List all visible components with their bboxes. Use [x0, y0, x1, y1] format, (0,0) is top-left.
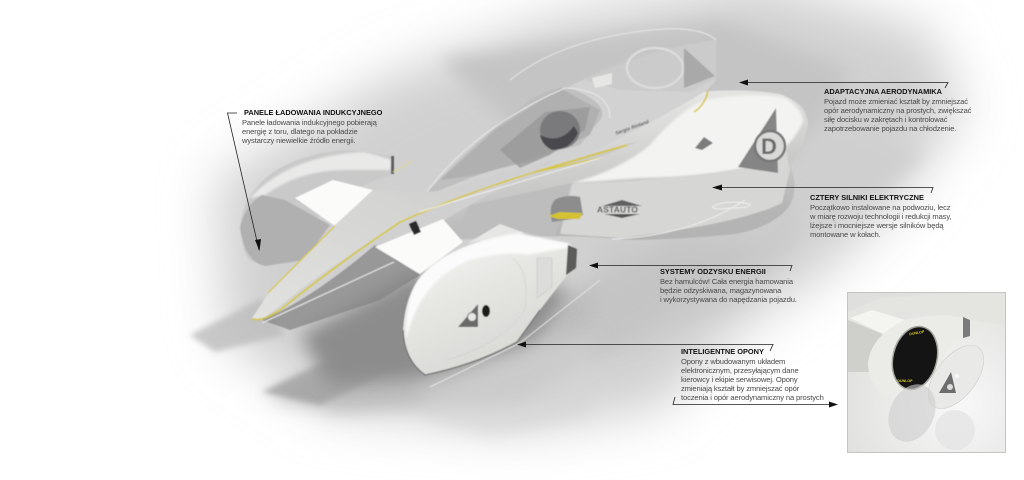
callout: panele ladowania: Panele ładowania indukcyjnego pobierają	[242, 118, 377, 127]
callout: adaptacyjna aerodynamika: zapotrzebowanie pojazdu na chłodzenie.	[824, 124, 956, 133]
tyre inset photo	[848, 292, 1006, 458]
callout: inteligentne opony: elektronicznym, przesyłającym dane	[681, 366, 799, 375]
callout: cztery silniki: CZTERY SILNIKI ELEKTRYCZNE	[810, 193, 924, 202]
callout: cztery silniki: lżejsze i mocniejsze wersje silników będą	[810, 221, 944, 230]
callout: inteligentne opony: zmieniają kształt by zmniejszać opór	[681, 384, 799, 393]
cockpit and canopy	[423, 29, 716, 197]
logo: Dunlop rear	[738, 108, 785, 173]
rear shadow	[420, 190, 800, 435]
logo: Dunlop rear: D	[761, 134, 777, 159]
callout: cztery silniki: montowane w kołach.	[810, 230, 881, 239]
wheel cover	[917, 336, 995, 418]
logo: Dunlop wheel	[458, 304, 490, 327]
callout: systemy odzysku: Bez hamulców! Cała energia hamowania	[660, 277, 793, 286]
cockpit and canopy: Sergio Rinland	[615, 119, 651, 137]
tyre inset photo: DUNLOP	[909, 330, 925, 336]
logo: Astauto: ASTAUTO	[597, 204, 638, 214]
left pod	[240, 150, 394, 266]
callout: inteligentne opony	[681, 347, 824, 402]
callout: inteligentne opony: kierowcy i ekipie serwisowej. Opony	[681, 375, 798, 384]
callout: adaptacyjna aerodynamika: opór aerodynamiczny na prostych, zwiększać	[824, 106, 971, 115]
callout: adaptacyjna aerodynamika: ADAPTACYJNA AERODYNAMIKA	[824, 87, 942, 96]
callout: panele ladowania: wystarczy niewielkie źródło energii.	[242, 136, 356, 145]
background haze	[190, 0, 965, 430]
helmet	[540, 111, 580, 150]
nose plate	[252, 91, 708, 330]
callout: systemy odzysku: SYSTEMY ODZYSKU ENERGII	[660, 267, 766, 276]
callout: inteligentne opony: toczenia i opór aerodynamiczny na prostych	[681, 393, 824, 402]
callout: adaptacyjna aerodynamika: siłę docisku w zakrętach i kontrolować	[824, 115, 947, 124]
callout lines	[228, 82, 948, 404]
callout: systemy odzysku: będzie odzyskiwana, magazynowana	[660, 286, 781, 295]
callout: cztery silniki	[810, 193, 951, 239]
tyre	[886, 322, 944, 394]
tyre inset photo: DUNLOP	[897, 379, 913, 383]
right front pod	[375, 219, 600, 387]
callout: systemy odzysku	[660, 267, 797, 304]
callout: adaptacyjna aerodynamika: Pojazd może zmieniać kształt by zmniejszać	[824, 97, 968, 106]
arrowheads	[255, 80, 838, 408]
callout: cztery silniki: w miarę rozwoju technologii i redukcji masy,	[810, 212, 951, 221]
callout: cztery silniki: Początkowo instalowane na podwoziu, lecz	[810, 203, 950, 212]
callout: panele ladowania	[242, 108, 382, 145]
rear body	[420, 90, 808, 240]
callout: panele ladowania: PANELE ŁADOWANIA INDUKCYJNEGO	[244, 108, 382, 117]
callout: systemy odzysku: i wykorzystywana do napędzania pojazdu.	[660, 295, 797, 304]
callout: adaptacyjna aerodynamika	[824, 87, 972, 133]
callout: inteligentne opony: Opony z wbudowanym układem	[681, 357, 785, 366]
callout: inteligentne opony: INTELIGENTNE OPONY	[681, 347, 764, 356]
callout: panele ladowania: energię z toru, dlatego na pokładzie	[242, 127, 358, 136]
logo: Astauto	[597, 200, 642, 218]
